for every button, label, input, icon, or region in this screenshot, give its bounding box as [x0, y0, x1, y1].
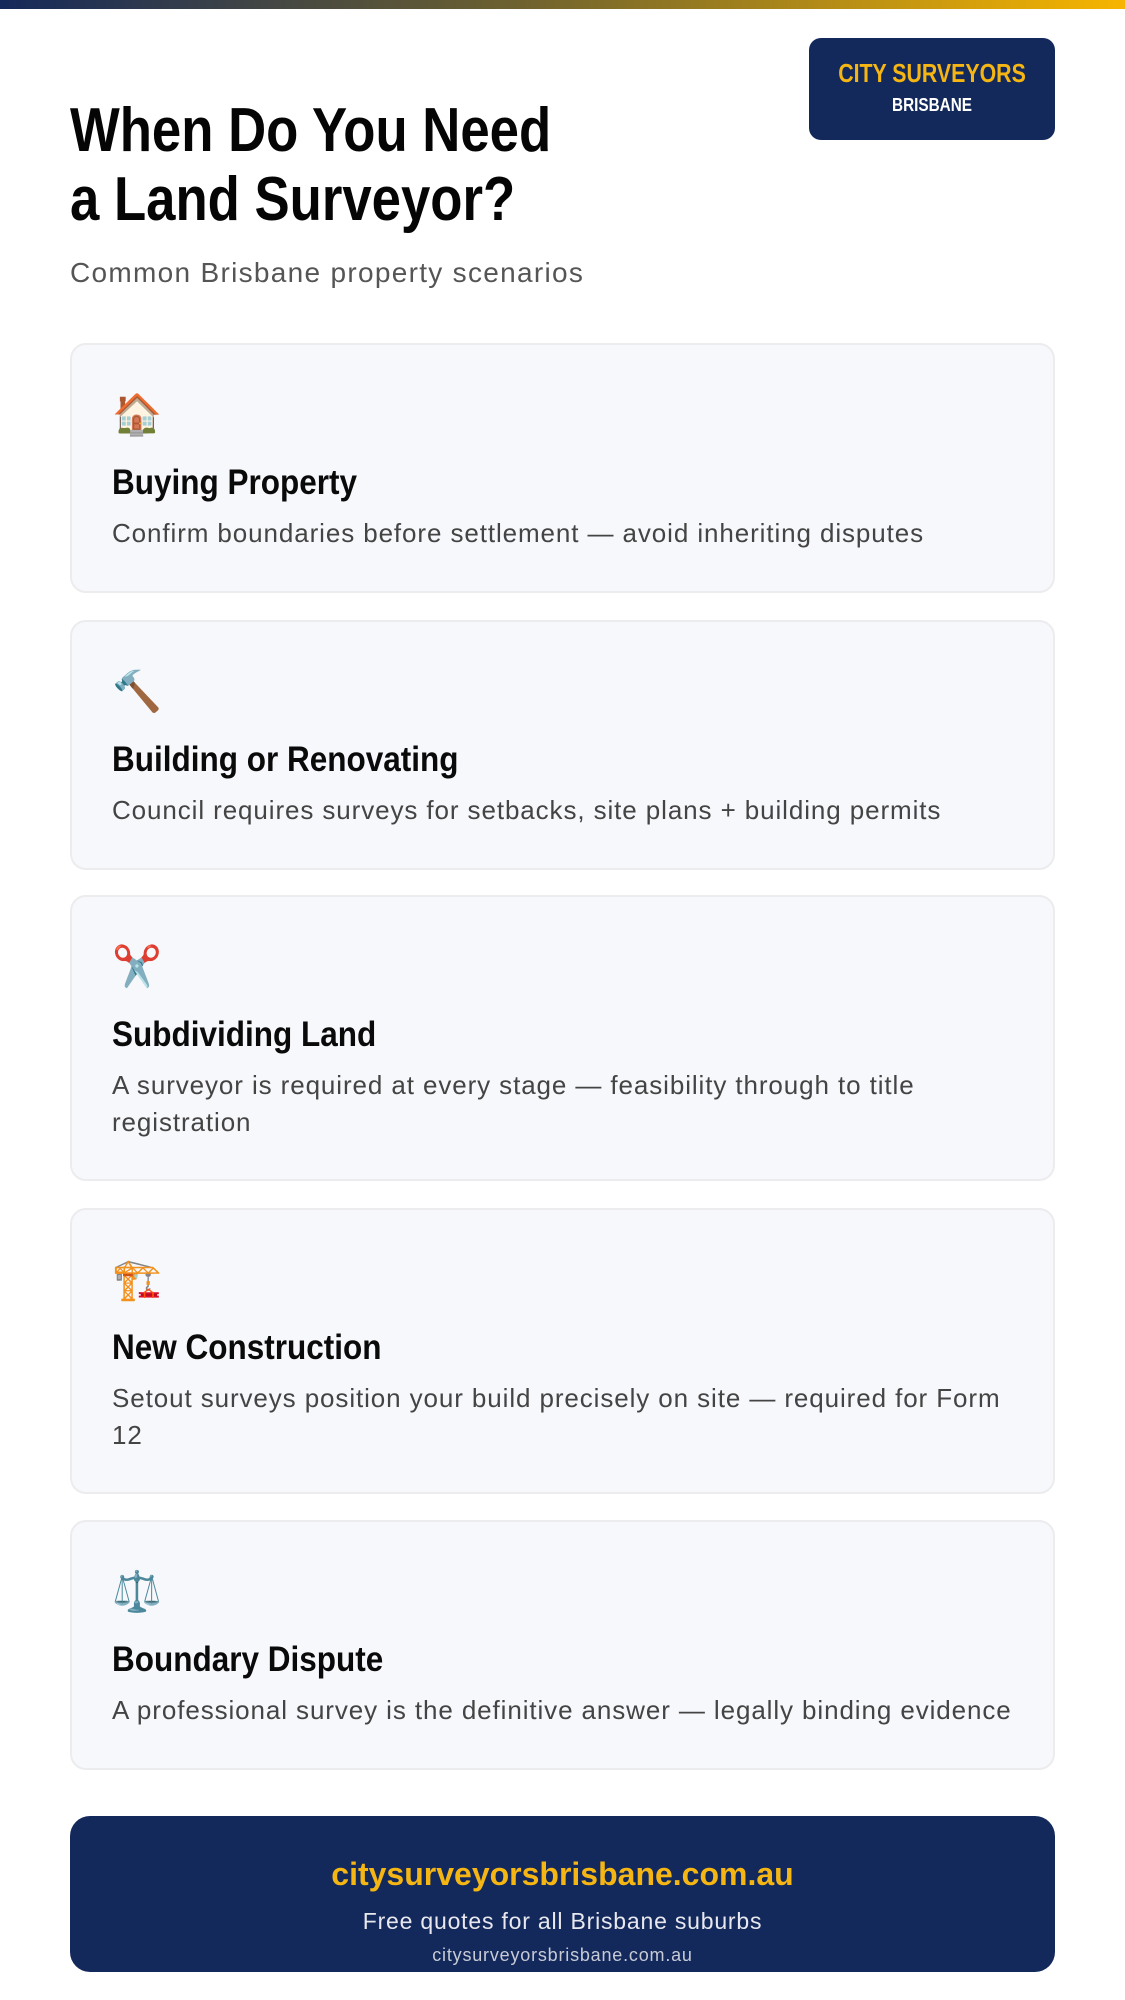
title: When Do You Need [70, 96, 551, 165]
panel: building [70, 620, 1055, 870]
heading: Building or Renovating [112, 740, 458, 779]
subtitle: Common Brisbane property scenarios [70, 257, 584, 288]
footer: citysurveyorsbrisbane.com.au [432, 1945, 693, 1965]
footer: citysurveyorsbrisbane.com.au [331, 1856, 794, 1892]
heading: New Construction [112, 1328, 382, 1367]
text: Council requires surveys for setbacks, site plans + building permits [112, 795, 941, 825]
badge: logo: CITY SURVEYORS [838, 58, 1026, 88]
panel: subdividing [70, 895, 1055, 1181]
heading: Subdividing Land [112, 1015, 376, 1054]
panel: buying property [70, 343, 1055, 593]
text: A professional survey is the definitive answer — legally binding evidence [112, 1695, 1012, 1725]
icon: scissors: ✂️ [112, 943, 162, 990]
heading: Boundary Dispute [112, 1640, 383, 1679]
icon: scales: ⚖️ [112, 1568, 162, 1615]
panel: boundary dispute [70, 1520, 1055, 1770]
icon: hammer: 🔨 [112, 668, 162, 715]
footer: Free quotes for all Brisbane suburbs [363, 1908, 762, 1934]
text: Confirm boundaries before settlement — avoid inheriting disputes [112, 518, 924, 548]
icon: crane: 🏗️ [112, 1256, 162, 1303]
badge: logo: BRISBANE [892, 95, 972, 115]
text: A surveyor is required at every stage — feasibility through to title registration [112, 1070, 915, 1137]
heading: Buying Property [112, 463, 357, 502]
text: Setout surveys position your build precisely on site — required for Form 12 [112, 1383, 1000, 1450]
title: a Land Surveyor? [70, 165, 515, 234]
title [70, 96, 551, 234]
footer [70, 1816, 1055, 1972]
icon: house: 🏠 [112, 391, 162, 438]
badge: logo [809, 38, 1055, 140]
panel: new construction [70, 1208, 1055, 1494]
